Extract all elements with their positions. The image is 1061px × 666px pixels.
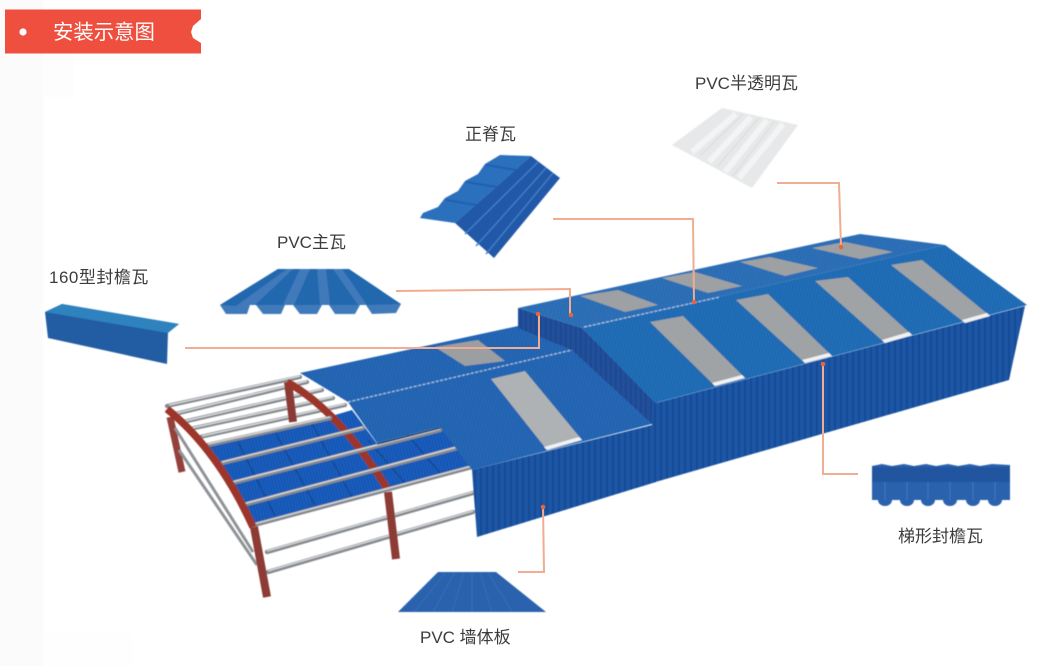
banner bullet [19, 28, 27, 36]
leader endpoint dots [536, 245, 843, 509]
leader: translucent tile [777, 183, 841, 247]
leader: ridge tile [553, 219, 694, 302]
front skylights [650, 260, 990, 386]
high section wall [652, 306, 1025, 483]
steel frame and building illustration [167, 234, 1027, 597]
back purlin highlights [169, 376, 345, 436]
back skylights [580, 242, 893, 312]
label: PVC main tile: PVC主瓦 [277, 233, 346, 252]
labels [49, 74, 983, 647]
steel frame: front purlins [208, 418, 473, 572]
label: ridge tile: 正脊瓦 [465, 125, 516, 144]
steel frame: front column [254, 527, 267, 597]
leader: 160 eave tile [185, 314, 539, 348]
low section wall [472, 424, 656, 537]
leader: PVC main tile [396, 289, 570, 315]
product: trapezoid eave tile [872, 464, 1010, 506]
label: trapezoid eave tile: 梯形封檐瓦 [898, 527, 983, 546]
title banner [5, 10, 201, 54]
leader: trapezoid eave tile [823, 364, 858, 474]
high roof ridge line [584, 297, 720, 327]
front purlin highlights [208, 417, 473, 571]
steel frame: back purlins [167, 377, 345, 437]
high section back roof [518, 234, 945, 328]
steel frame: middle rafter [287, 382, 388, 490]
low roof cut shadow [377, 428, 440, 444]
product: ridge tile [420, 155, 560, 258]
roof panels seen through the frame [208, 410, 473, 527]
product: translucent tile [672, 108, 798, 188]
leader: wall panel [518, 507, 544, 572]
leader lines [185, 183, 858, 572]
low roof skylight: front [491, 371, 582, 450]
steel frame: short left column [170, 417, 182, 472]
high section front roof [582, 245, 1027, 403]
low roof skylight: back [435, 340, 505, 366]
steel frame: front left rafter [167, 409, 253, 527]
steel frame: side purlins [175, 428, 257, 565]
banner title: 安装示意图 [53, 21, 155, 44]
label: wall panel: PVC 墙体板 [420, 628, 511, 647]
product pieces [45, 108, 1010, 612]
low section roof [300, 326, 652, 470]
low roof ridge line [348, 350, 572, 402]
steel frame: middle column [388, 492, 396, 559]
steel frame: back column [288, 382, 293, 422]
product: PVC main tile [220, 269, 401, 314]
skylight white tips [712, 313, 990, 386]
gable wall between sections [518, 308, 657, 424]
label: 160 eave tile: 160型封檐瓦 [49, 268, 149, 287]
label: translucent tile: PVC半透明瓦 [695, 74, 798, 93]
product: 160 eave tile [45, 304, 179, 364]
product: PVC wall panel [398, 572, 546, 612]
